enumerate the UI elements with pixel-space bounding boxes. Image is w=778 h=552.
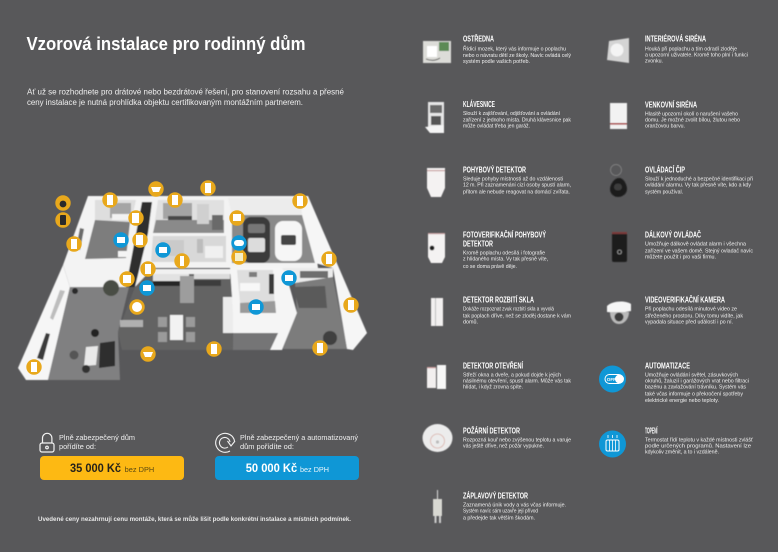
description: vás ještě dříve, než požár vypukne. <box>463 444 544 450</box>
description: elektrické energie nebo teploty. <box>645 398 719 404</box>
dining table <box>158 315 195 342</box>
item: fire detector: POŽÁRNÍ DETEKTOR <box>463 425 520 436</box>
marker: window 9 <box>312 340 328 356</box>
description: systém podle vašich potřeb. <box>463 59 530 65</box>
garage <box>228 198 315 263</box>
price badge: bez DPH <box>125 467 154 474</box>
description <box>645 112 741 129</box>
description: Rozpozná kouř nebo zvýšenou teplotu a varuje <box>463 438 572 444</box>
item: automation: AUTOMATIZACE <box>645 361 690 370</box>
item: opening detector <box>427 360 571 391</box>
marker: window 3 <box>66 236 82 252</box>
icon: control unit <box>423 41 451 63</box>
marker: remote <box>55 212 71 228</box>
icon: video camera <box>607 302 631 324</box>
description: bazénu a zavlažování trávníku. Systém vás <box>645 385 746 391</box>
label: pořídíte od: <box>59 442 96 451</box>
left wall wedge <box>18 265 70 380</box>
description <box>463 307 571 326</box>
marker: window 1 <box>102 192 118 208</box>
car dark <box>243 217 270 263</box>
item: video camera: VIDEOVERIFIKAČNÍ KAMERA <box>645 294 725 305</box>
item: control unit: OSTŘEDNA <box>463 33 494 44</box>
item: opening detector: DETEKTOR OTEVŘENÍ <box>463 360 523 371</box>
description: 12 m. Při zaznamenání cizí osoby spustí alarm, <box>463 183 571 189</box>
marker: siren <box>119 271 135 287</box>
lower floor <box>233 333 278 350</box>
description: Při poplachu odesílá minutové video ze <box>645 307 738 313</box>
marker: camera top <box>148 181 164 197</box>
description <box>463 438 572 450</box>
icon: refresh <box>216 433 235 452</box>
description <box>463 373 571 391</box>
item: motion detector <box>427 164 571 197</box>
marker: window 7 <box>321 251 337 267</box>
item: keypad <box>425 99 571 133</box>
marker: control unit <box>231 249 247 265</box>
item: glass break detector: DETEKTOR ROZBITÍ SKLA <box>463 295 534 305</box>
description: můžete použít i pro vaši firmu. <box>645 254 716 261</box>
title: FOTOVERIFIKAČNÍ POHYBOVÝ <box>463 229 546 240</box>
label <box>59 433 135 451</box>
icon: radiator <box>599 430 626 458</box>
icon: fire detector <box>422 424 452 452</box>
item: fire detector <box>422 424 572 452</box>
item: remote control: DÁLKOVÝ OVLÁDAČ <box>645 229 701 240</box>
item: glass break detector <box>431 295 571 326</box>
item: video camera <box>607 294 743 326</box>
description: Systém navíc sám uzavře její přívod <box>463 509 538 515</box>
bedroom <box>282 268 347 349</box>
title <box>463 229 546 249</box>
description <box>645 437 754 456</box>
item: motion detector: POHYBOVÝ DETEKTOR <box>463 164 526 175</box>
description: Houká při poplachu a tím odradí zloděje <box>645 47 738 53</box>
marker: flood <box>174 253 190 269</box>
description: násilnému otevření, spustí alarm. Může vás tak <box>463 378 571 385</box>
icon: toggle switch <box>599 366 626 392</box>
item: automation <box>599 361 749 404</box>
icon: outdoor siren <box>610 103 627 129</box>
kitchen counter <box>153 269 233 333</box>
price badge: 50 000 Kč <box>246 461 297 475</box>
plants <box>120 320 143 327</box>
description: systém používal. <box>645 190 683 196</box>
icon: photo detector <box>428 233 445 263</box>
icon: glass break detector <box>431 298 443 326</box>
item: keypad: KLÁVESNICE <box>463 99 495 109</box>
title: Vzorová instalace pro rodinný dům <box>26 33 306 54</box>
description <box>645 372 749 404</box>
description: domů. <box>463 319 478 326</box>
description: domu. Je možné zvolit bílou, žlutou nebo <box>645 118 741 124</box>
marker: window 6 <box>292 193 308 209</box>
description <box>463 111 571 130</box>
price badge: bez DPH <box>300 467 329 474</box>
description: hlídat, i když zrovna spíte. <box>463 385 523 391</box>
description: okruhů, žaluzií i garážových vrat nebo filtraci <box>645 377 749 384</box>
item: flood detector: ZÁPLAVOVÝ DETEKTOR <box>463 490 528 501</box>
icon: indoor siren <box>607 38 629 63</box>
price badge <box>215 456 359 480</box>
description: může ovládat třeba jen garáž. <box>463 123 530 130</box>
marker: heating 1 <box>113 232 129 248</box>
icon: flood detector <box>433 490 442 523</box>
intro text: ceny instalace je nutná prohlídka objektu certifikovaným montážním partnerem. <box>27 98 303 107</box>
description: a předejde tak větším škodám. <box>463 516 535 522</box>
description <box>463 251 548 270</box>
description: Slouží k zajišťování, odjišťování a ovládání <box>463 111 560 117</box>
item: control chip <box>610 164 753 197</box>
item: control unit <box>423 33 571 65</box>
description: ovládání alarmu. Vy tak přesně víte, kdo a kdy <box>645 183 751 189</box>
description: co se doma právě děje. <box>463 264 517 270</box>
description: střeženého prostoru. Díky tomu vidíte, jak <box>645 314 743 320</box>
description <box>645 242 753 261</box>
description: tak poplach dříve, než se zloděj dostane k vám <box>463 314 571 320</box>
marker: window 10 <box>206 341 222 357</box>
description: Kromě poplachu odesílá i fotografie <box>463 251 546 257</box>
intro text: Ať už se rozhodnete pro drátové nebo bezdrátové řešení, pro stanovení rozsahu a přesné <box>27 88 345 96</box>
marker: keypad <box>128 210 144 226</box>
icon: padlock <box>40 433 54 452</box>
icon: toggle switch: OFF <box>607 377 616 382</box>
price block: secured house <box>40 433 184 480</box>
icon: control chip <box>610 164 627 197</box>
label <box>240 433 358 451</box>
left room <box>76 200 136 259</box>
label: dům pořídíte od: <box>240 442 294 451</box>
item: outdoor siren: VENKOVNÍ SIRÉNA <box>645 99 697 109</box>
description: Umožňuje ovládání světel, zásuvkových <box>645 372 738 378</box>
description: nebo o návratu dětí ze školy. Navíc ovládá celý <box>463 53 571 59</box>
footnote: Uvedené ceny nezahrnují cenu montáže, která se může lišit podle konkrétní instalace a místních podmínek. <box>38 515 351 523</box>
intro text <box>27 88 345 107</box>
description: Umožňuje dálkově ovládat alarm i všechna <box>645 242 747 248</box>
description: Dokáže rozpoznat zvuk rozbití skla a vyvolá <box>463 307 555 313</box>
description: přitom ale nebude reagovat na domácí zvířata. <box>463 190 570 196</box>
description: zvonku. <box>645 59 663 65</box>
marker: motion <box>132 232 148 248</box>
description <box>463 45 571 65</box>
description: oranžovou barvu. <box>645 123 685 129</box>
description <box>645 176 753 196</box>
marker: fire <box>129 299 145 315</box>
item: heating: TOPENÍ <box>645 425 658 435</box>
bathroom and door walls <box>230 267 297 350</box>
description: zařízení ve vašem domě. Stejný ovladač navíc <box>645 249 753 255</box>
description <box>463 176 571 196</box>
price badge: 35 000 Kč <box>70 461 121 475</box>
description: Termostat řídí teplotu v každé místnosti zvlášť <box>645 437 754 443</box>
description: a upozorní uživatele. Kromě toho plní i funkci <box>645 53 748 59</box>
marker: window 4 <box>140 261 156 277</box>
description: podle určených programů. Nastavení lze <box>645 442 752 449</box>
marker: window 5 <box>200 180 216 196</box>
item: flood detector <box>433 490 566 523</box>
marker: camera lower <box>140 346 156 362</box>
kitchen back room <box>153 200 224 233</box>
description: zařízení z jednoho místa. Druhá klávesnice pak <box>463 118 571 124</box>
item: heating <box>599 425 754 458</box>
marker: heating 5 <box>248 299 264 315</box>
icon: opening detector <box>427 365 446 389</box>
title: DETEKTOR <box>463 240 493 249</box>
description: Střeží okna a dveře, a pokud dojde k jejich <box>463 373 561 379</box>
label: Plně zabezpečený a automatizovaný <box>240 433 358 442</box>
description <box>463 503 566 522</box>
central room <box>151 236 226 262</box>
price badge <box>40 456 184 480</box>
description: Řídicí mozek, který vás informuje o poplachu <box>463 45 566 53</box>
item: indoor siren <box>607 34 748 65</box>
marker: window 8 <box>343 297 359 313</box>
upper walls <box>63 196 318 287</box>
marker: heating 2 <box>155 242 171 258</box>
icon: remote control <box>612 232 627 262</box>
item: indoor siren: INTERIÉROVÁ SIRÉNA <box>645 34 706 44</box>
car white <box>275 221 302 261</box>
item: control chip: OVLÁDACÍ ČIP <box>645 164 685 175</box>
installation markers <box>26 180 359 375</box>
right wall wedge <box>300 196 367 350</box>
description: také včas informuje o překročení spotřeby <box>645 391 743 397</box>
description: Slouží k jednoduché a bezpečné identifikaci při <box>645 176 753 182</box>
description: Sleduje pohyby místnosti až do vzdálenosti <box>463 176 563 182</box>
price block: secured and automated house <box>215 433 359 480</box>
dining floor <box>118 269 233 350</box>
marker: heating 3 <box>139 280 155 296</box>
marker: control chip <box>55 195 71 211</box>
icon: motion detector <box>427 168 445 197</box>
description: Hlasitě upozorní okolí o narušení vašeho <box>645 112 739 118</box>
icon: keypad <box>425 102 444 133</box>
living room furniture <box>37 280 119 373</box>
description <box>645 307 743 326</box>
item: remote control <box>612 229 753 262</box>
description <box>645 47 748 65</box>
hallway <box>126 202 152 287</box>
marker: garage keypad <box>229 210 245 226</box>
description: kdykoliv změnit, a to i vzdáleně. <box>645 450 719 456</box>
living room floor <box>48 287 129 380</box>
marker: window 2 <box>167 192 183 208</box>
marker: automation <box>231 235 247 251</box>
item: outdoor siren <box>610 99 741 129</box>
description: z hlídaného místa. Vy tak přesně víte, <box>463 257 548 263</box>
item: photo detector <box>428 229 548 270</box>
label: Plně zabezpečený dům <box>59 433 135 442</box>
floor plan illustration <box>18 196 367 380</box>
description: vypadala situace před událostí i po ní. <box>645 320 733 326</box>
marker: heating 4 <box>281 270 297 286</box>
marker: door <box>26 359 42 375</box>
description: Zaznamená únik vody a vás včas informuje. <box>463 503 566 509</box>
